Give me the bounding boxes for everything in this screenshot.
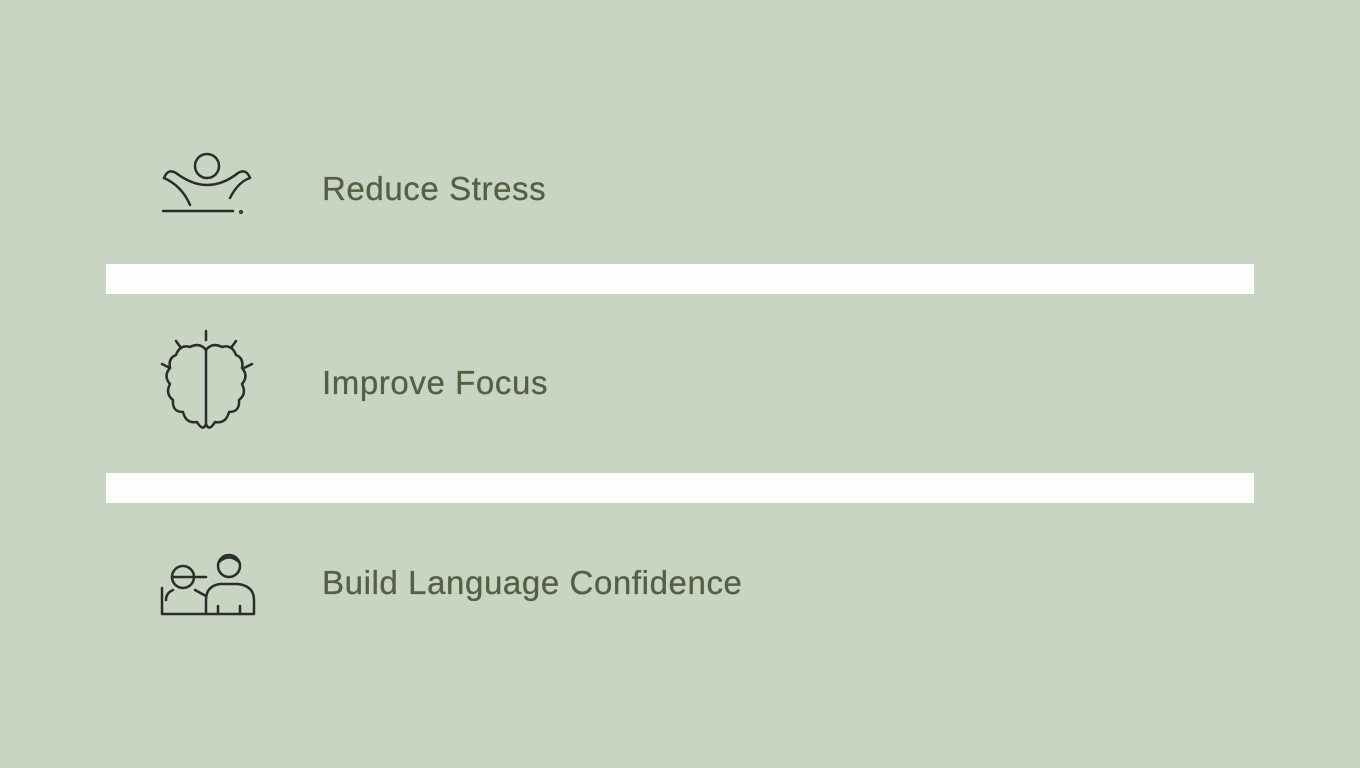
text: Reduce Stress: Reduce Stress — [322, 170, 546, 207]
divider bar 2 — [106, 473, 1254, 503]
divider bar 1 — [106, 264, 1254, 294]
icon: brain — [160, 330, 254, 429]
text: Build Language Confidence: Build Language Confidence — [322, 564, 742, 601]
text: Improve Focus: Improve Focus — [322, 364, 548, 401]
icon: relaxed person — [162, 152, 252, 214]
icon: two people — [160, 554, 256, 616]
